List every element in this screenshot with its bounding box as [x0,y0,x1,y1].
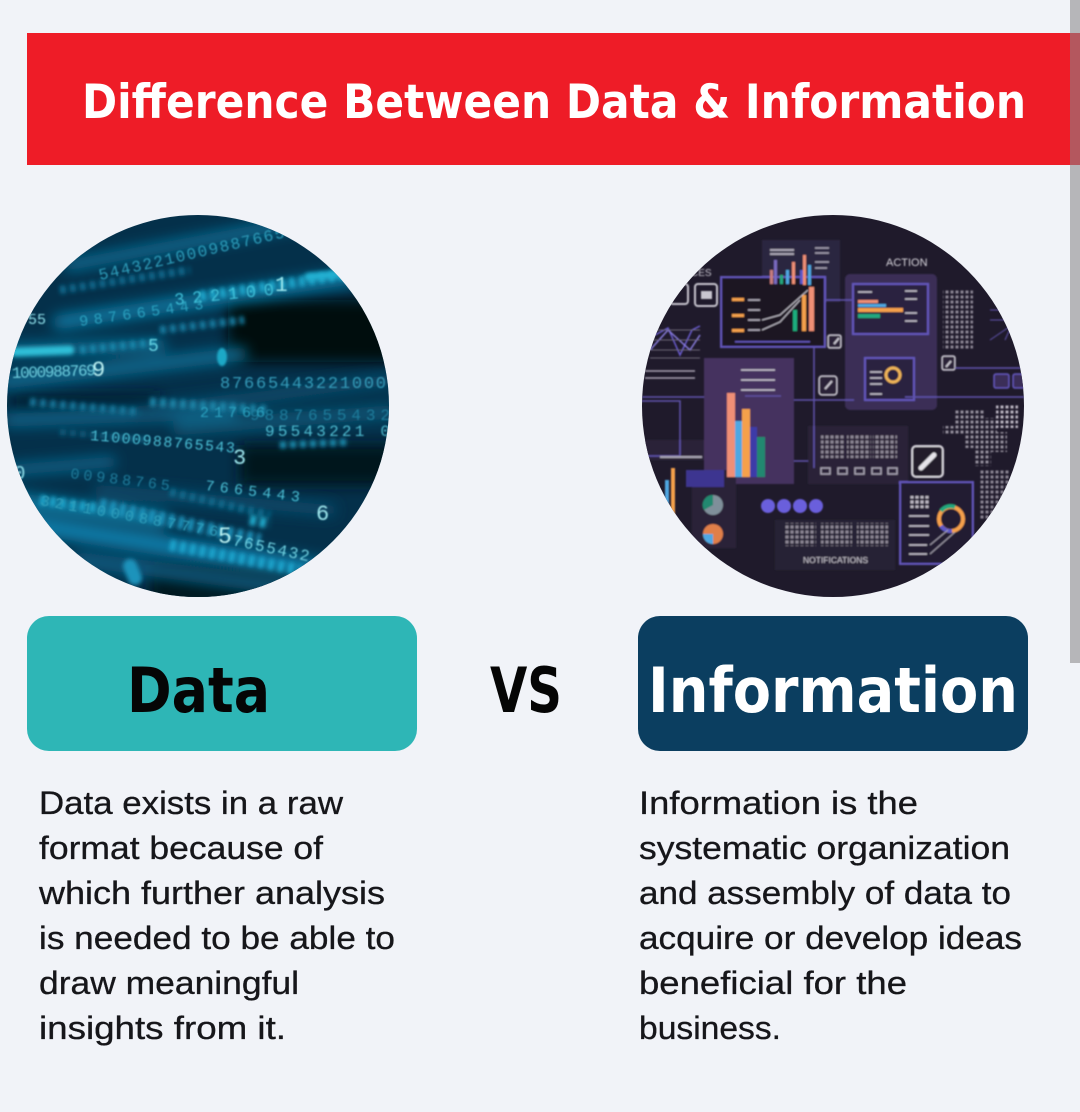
information description: acquire or develop ideas [639,920,1022,956]
top chart frame [721,277,825,347]
data photo circle: 3211000887776 [39,493,219,541]
data photo circle: 5 [148,337,159,357]
data photo circle: 1 [275,275,288,298]
data description: draw meaningful [39,965,299,1001]
dotted world map [943,410,1007,466]
information description: Information is the [639,785,918,821]
information dashboard circle: CES [691,268,712,279]
data label box [27,616,417,751]
pie charts [703,495,723,515]
data description: which further analysis [38,875,385,911]
data photo circle: 987665443 [78,297,204,331]
gauge frame [865,358,914,400]
data photo circle: 9 [92,358,105,383]
vs label: VS [490,654,562,727]
data description: format because of [39,830,323,866]
information label box: Information [648,654,1018,727]
data photo circle [5,215,400,605]
dotted block top right [943,289,973,350]
line chart left [655,326,700,355]
data photo circle: 21766 [200,405,265,422]
big bar chart [727,393,735,477]
information dashboard circle: NOTIFICATIONS [803,555,868,565]
data photo circle: 7665443 [204,478,301,507]
data photo circle: 55 [28,312,46,329]
purple dots [761,499,775,513]
scrollbar strip [1070,0,1080,663]
data description: Data exists in a raw [39,785,344,821]
top mini bars [770,250,794,254]
data photo circle: 322100 [174,282,275,311]
small square buttons right [994,374,1009,388]
right chart frame [853,284,928,334]
dotted out-of-focus digit streaks [30,270,350,570]
information description: systematic organization [639,830,1010,866]
information description: business. [639,1010,781,1046]
information description [639,785,1022,1046]
image captions: ACTION [886,257,928,269]
data photo circle: 7655432 [231,532,311,566]
information description: beneficial for the [639,965,907,1001]
data photo circle: 1000988769 [12,362,96,383]
information description: and assembly of data to [639,875,1011,911]
data photo circle: 9887655432 [250,407,390,425]
title banner [27,33,1080,165]
link buttons [828,335,841,348]
data photo circle: 5 [218,524,232,550]
data photo circle: 87665443221000 [220,375,386,394]
connectors [642,300,1025,468]
data photo circle: 54432210009887665 [97,225,286,285]
data photo circle: 95543221 0 [265,423,390,441]
data description [38,785,395,1046]
data photo circle: 00988765 [69,466,171,495]
information label box [638,616,1028,751]
left lower frame [642,399,682,458]
panels [762,240,840,302]
data description: is needed to be able to [39,920,395,956]
data label box: Data [127,654,270,727]
data photo circle: 6 [316,502,329,527]
data photo circle: 11000988765543 [90,428,235,458]
bottom right frame [900,482,973,564]
information dashboard circle [630,215,1028,597]
dotted tables [821,435,845,458]
data photo circle: 0 [14,463,25,485]
data description: insights from it. [39,1010,286,1046]
data photo circle: 3 [233,446,246,471]
